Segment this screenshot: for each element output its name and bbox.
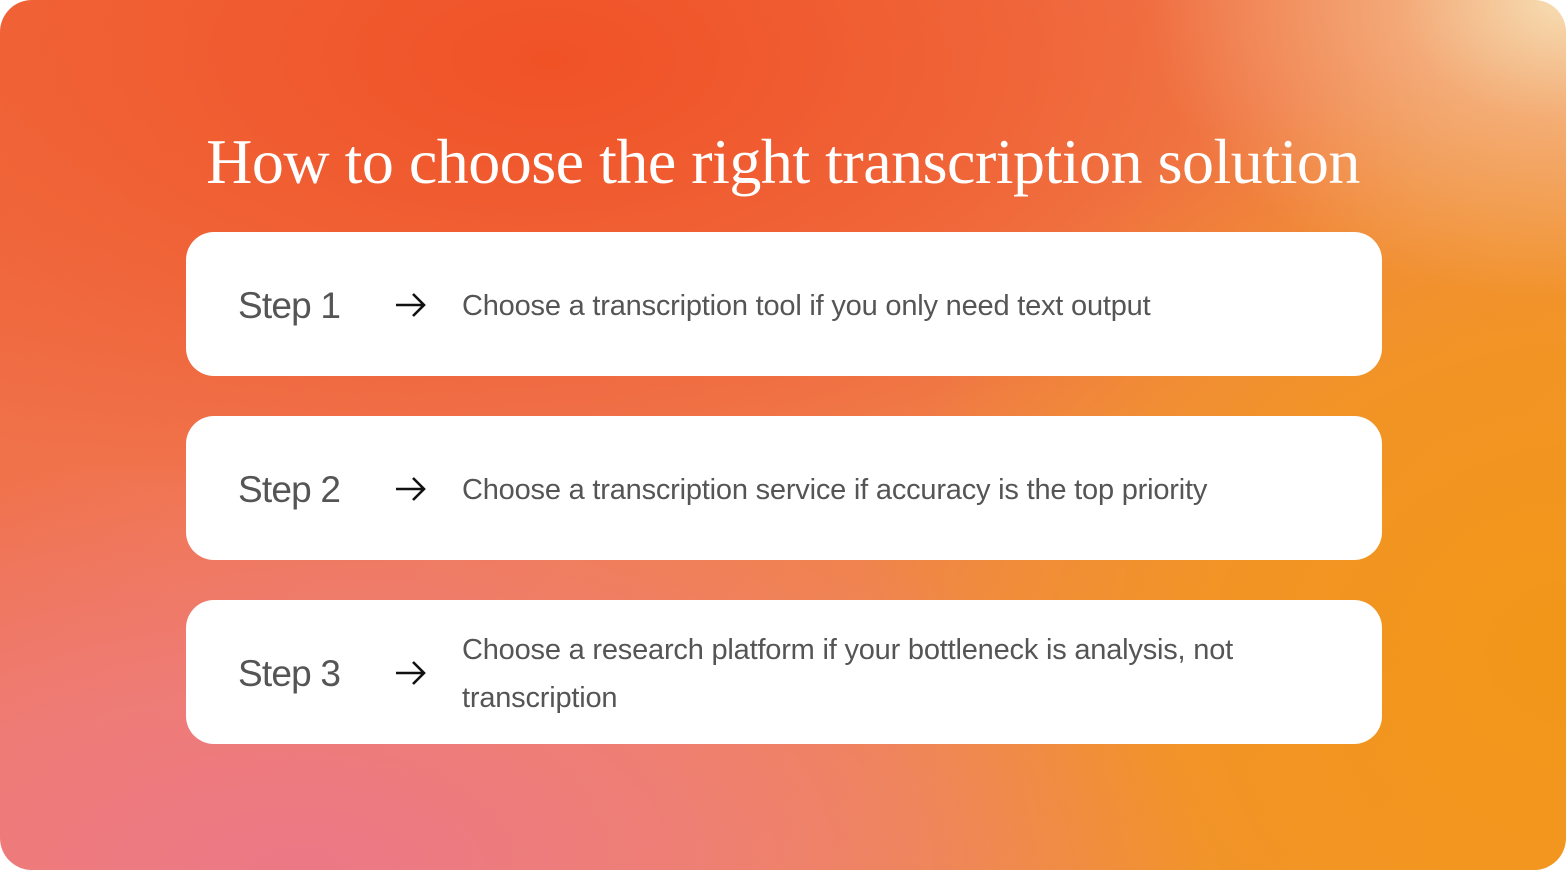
step label 1: Step 1	[238, 285, 340, 326]
description 1: Choose a transcription tool if you only need text output	[462, 290, 1150, 322]
card: step 1	[186, 232, 1382, 376]
step label 3: Step 3	[238, 653, 340, 694]
card: step 3	[186, 600, 1382, 744]
description 2: Choose a transcription service if accuracy is the top priority	[462, 474, 1207, 506]
arrow 3	[396, 661, 426, 685]
step label 2: Step 2	[238, 469, 340, 510]
arrow 1	[396, 293, 426, 317]
card: step 2	[186, 416, 1382, 560]
arrow 2	[396, 477, 426, 501]
description 3: Choose a research platform if your bottleneck is analysis, not transcription	[462, 634, 1233, 714]
title: How to choose the right transcription solution	[206, 126, 1360, 197]
